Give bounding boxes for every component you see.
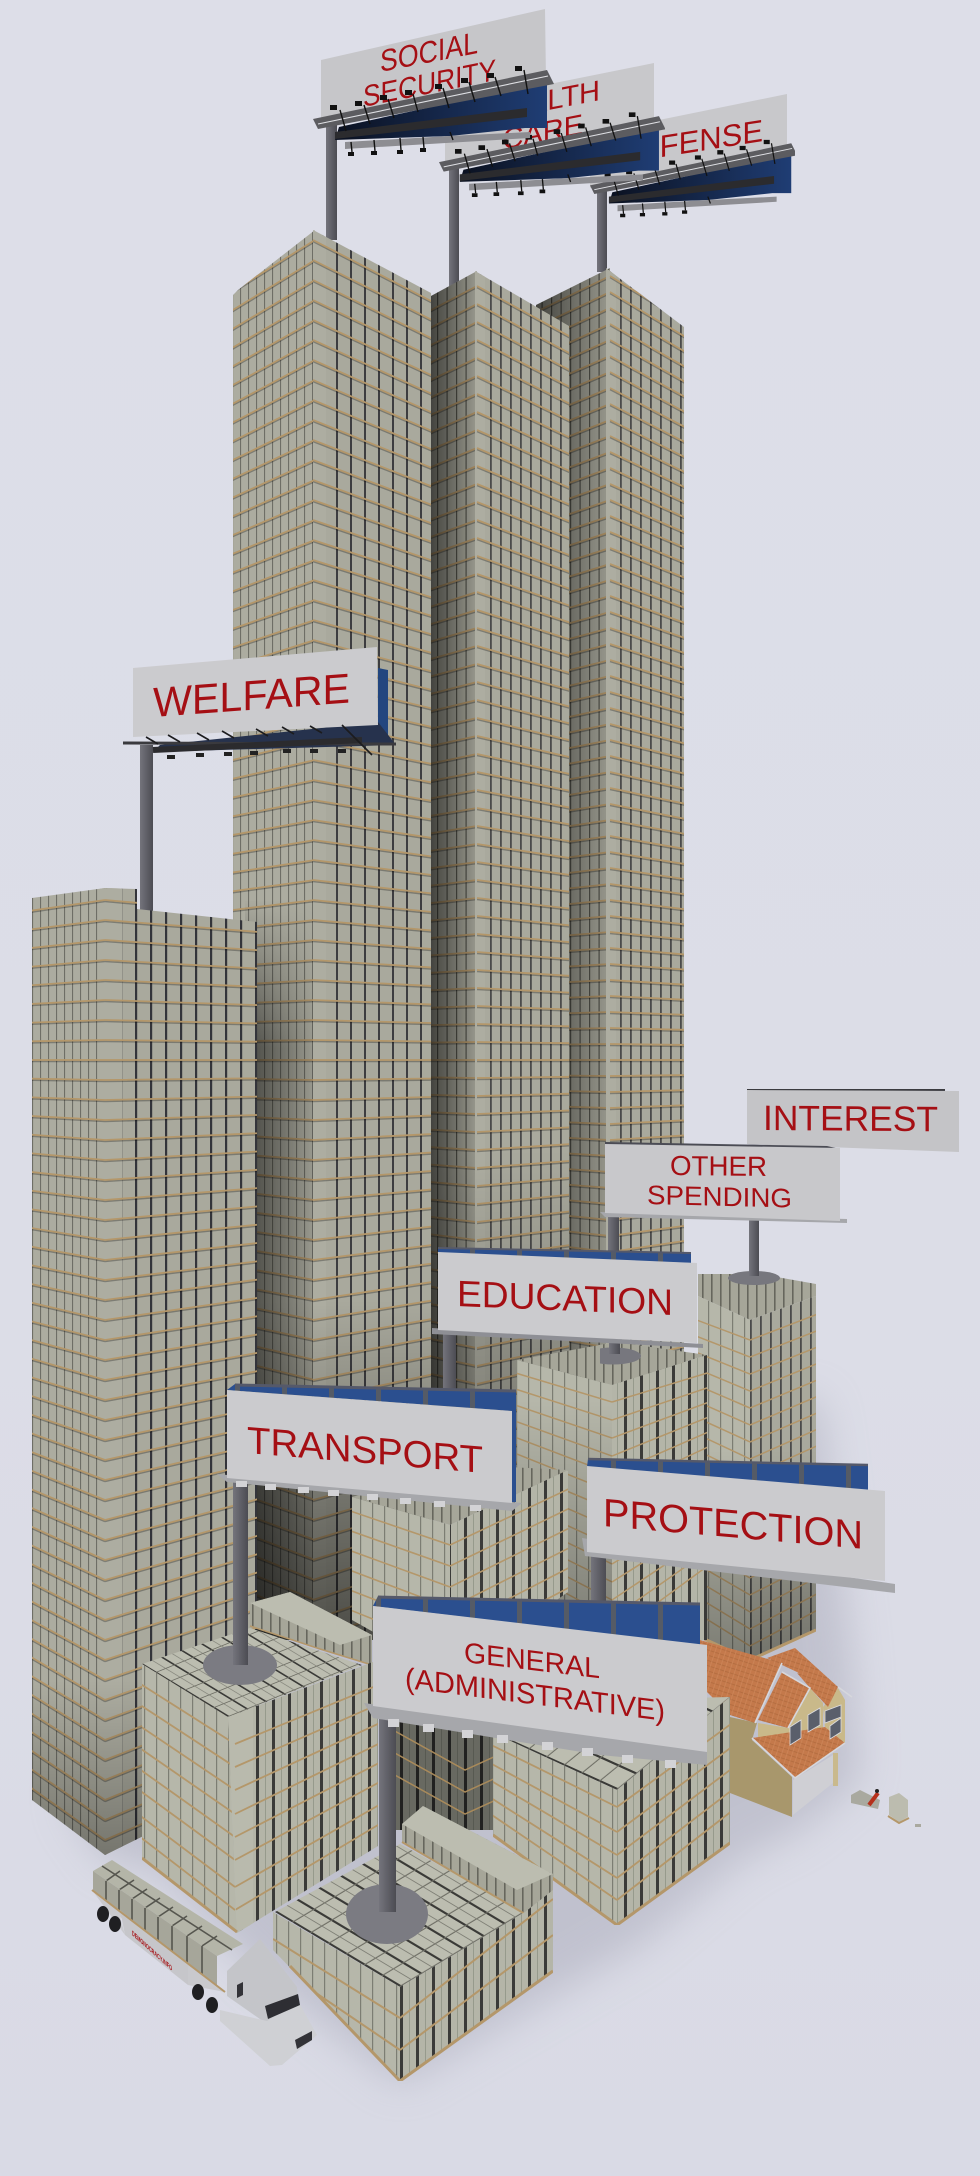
billboard: other spending (600, 1142, 847, 1364)
pole: transport (203, 1482, 277, 1685)
billboard: education (432, 1247, 703, 1388)
billboard: general (administrative): (ADMINISTRATIVE) (405, 1662, 665, 1728)
billboard: transport: TRANSPORT (247, 1420, 483, 1482)
billboard: social security (313, 9, 554, 240)
roofs (695, 1640, 852, 1778)
billboard: social security: SECURITY (363, 54, 496, 114)
trailer (92, 1890, 225, 1992)
pole: health care (449, 200, 459, 290)
block: dark rear stack (396, 1722, 493, 1830)
billboard: welfare: WELFARE (153, 665, 350, 726)
billboard: interest (728, 1089, 959, 1285)
block: transport mid stack (352, 1468, 568, 1632)
billboard: general (administrative) (364, 1596, 707, 1768)
raised rear layer (250, 1592, 372, 1665)
block: general front stack (273, 1806, 553, 2081)
billboard: transport (217, 1384, 522, 1511)
figure and pallet of money (851, 1789, 921, 1827)
trailer: DEMONOCRACY.INFO (132, 1928, 172, 1973)
block: other-interest stack (698, 1274, 816, 1657)
ground shadow (77, 1400, 867, 2085)
truck cab (220, 1939, 317, 2066)
billboard: defense (590, 94, 795, 272)
billboard: other spending: SPENDING (647, 1180, 792, 1214)
billboard: health care (439, 63, 665, 200)
tower: defense (536, 268, 684, 1385)
raised rear layer (402, 1806, 553, 1914)
tower: welfare (32, 888, 257, 1855)
billboard: other spending: OTHER (670, 1150, 767, 1182)
billboard: social security: SOCIAL (380, 25, 478, 79)
billboard: defense: DEFENSE (617, 113, 763, 171)
truck (92, 1860, 316, 2066)
walls (730, 1688, 845, 1817)
billboard: protection (582, 1458, 895, 1593)
tower: health care (431, 271, 569, 1494)
pole: protection (591, 1550, 606, 1610)
tower: social security (233, 230, 431, 1640)
wheels (97, 1906, 277, 2063)
billboard: protection: PROTECTION (603, 1491, 863, 1558)
billboard: general (administrative): GENERAL (464, 1637, 600, 1685)
billboard: welfare (123, 647, 396, 911)
block: protection stack (517, 1344, 707, 1640)
windows (790, 1705, 841, 1745)
block: general right stack (493, 1697, 730, 1925)
billboard: interest: INTEREST (763, 1098, 938, 1139)
billboard: health care: CARE (502, 109, 583, 157)
house (700, 1640, 852, 1817)
block: transport front stack (142, 1592, 378, 1933)
billboard: education: EDUCATION (457, 1273, 673, 1323)
pole: general (346, 1719, 428, 1944)
billboard: health care: HEALTH (488, 75, 600, 129)
truck bed stack (93, 1860, 243, 1989)
